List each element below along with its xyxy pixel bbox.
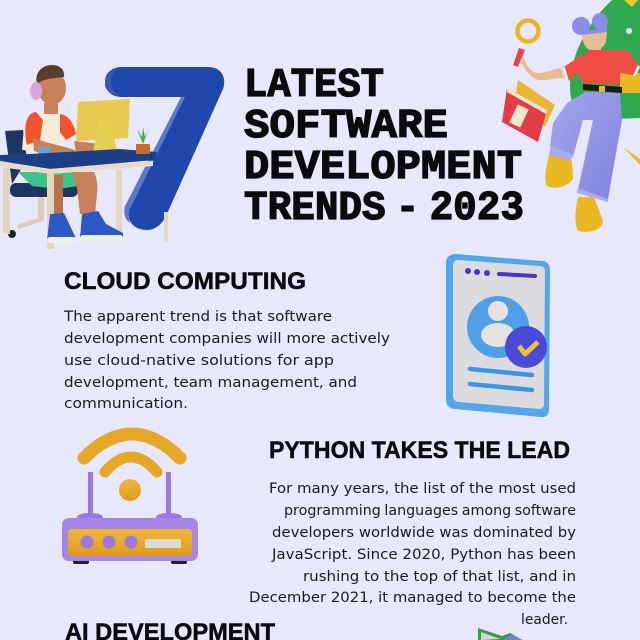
text: cloud computing body: The apparent trend is that software (63, 309, 332, 325)
icon: profile card with check (446, 254, 550, 417)
text: python body (249, 481, 577, 628)
text: python body: For many years, the list of the most used (269, 481, 576, 497)
title: SOFTWARE (244, 104, 448, 150)
illustration: character with magnifier and books (502, 0, 640, 232)
title: DEVELOPMENT (244, 145, 522, 191)
title: TRENDS - 2023 (244, 186, 524, 232)
icon: folder top, cropped (478, 628, 523, 640)
illustration: developer at desk (0, 65, 168, 249)
text: cloud computing body (63, 309, 391, 412)
text: cloud computing body: use cloud-native solutions for app (64, 353, 334, 369)
heading: cloud computing: CLOUD COMPUTING (64, 268, 306, 295)
text: cloud computing body: development companies will more actively (64, 331, 391, 347)
icon: wifi router (62, 434, 198, 564)
title: LATEST (244, 63, 384, 109)
text: python body: leader. (521, 612, 568, 628)
title (244, 63, 524, 232)
text: cloud computing body: development, team management, and (64, 375, 357, 391)
text: python body: developers worldwide was dominated by (272, 525, 577, 541)
big numeral 7 (105, 67, 224, 230)
text: cloud computing body: communication. (64, 396, 188, 412)
text: python body: December 2021, it managed to become the (249, 590, 576, 606)
text: python body: rushing to the top of that list, and in (303, 569, 576, 585)
text: python body: JavaScript. Since 2020, Python has been (271, 547, 576, 563)
text: python body: programming languages among software (284, 503, 576, 519)
heading: python takes the lead: PYTHON TAKES THE LEAD (269, 437, 570, 464)
